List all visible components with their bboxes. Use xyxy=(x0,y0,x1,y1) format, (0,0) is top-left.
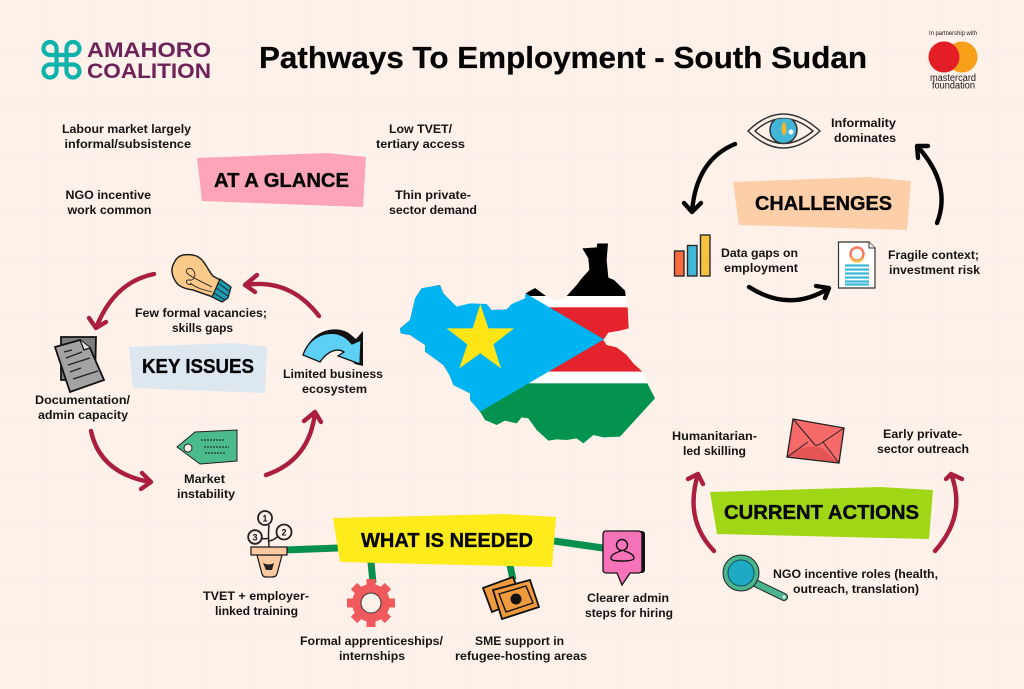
icon: eye xyxy=(748,114,820,148)
arrow: few vacancies to documentation xyxy=(89,274,154,328)
text: informality dominates xyxy=(831,116,896,145)
text: NGO incentive work xyxy=(66,188,152,217)
text: clearer admin xyxy=(585,591,673,620)
text: formal apprenticeships: Formal apprenticeships/ xyxy=(300,634,444,648)
logo: Mastercard Foundation xyxy=(928,31,978,92)
logo: Mastercard Foundation: In partnership with xyxy=(929,31,977,37)
icon: gear xyxy=(347,579,395,627)
heading: key issues: KEY ISSUES xyxy=(142,356,254,378)
text: low TVET: Low TVET/ xyxy=(389,122,453,136)
icon: profile pin xyxy=(603,531,645,585)
text: documentation: admin capacity xyxy=(38,408,128,422)
text: early private-sector outreach xyxy=(877,427,969,456)
panel: at a glance xyxy=(62,122,477,217)
heading: at a glance xyxy=(197,153,366,207)
logo wordmark: COALITION xyxy=(87,60,211,83)
text: thin private sector xyxy=(389,188,477,217)
text: early private-sector outreach: sector outreach xyxy=(877,442,969,456)
panel: current actions xyxy=(672,419,969,598)
text: NGO incentive roles: NGO incentive roles (health, xyxy=(773,567,938,581)
logo wordmark xyxy=(87,39,211,83)
icon: magnifying glass xyxy=(723,555,786,598)
map: South Sudan flag xyxy=(400,243,655,444)
text: NGO incentive roles: outreach, translation) xyxy=(793,582,919,596)
text: fragile context xyxy=(888,248,980,277)
arrow: market to ecosystem xyxy=(266,412,321,475)
text: NGO incentive work: NGO incentive xyxy=(66,188,151,202)
logo: Mastercard Foundation: foundation xyxy=(932,80,975,92)
text: SME support xyxy=(455,634,587,663)
icon: plant pot xyxy=(248,511,292,577)
icon: envelope xyxy=(787,419,844,463)
text: NGO incentive work: work common xyxy=(66,203,152,217)
text: market instability xyxy=(177,472,235,501)
arrow: informality to data gaps xyxy=(684,144,735,212)
icon: bar chart xyxy=(674,235,710,276)
text: documentation: Documentation/ xyxy=(35,393,131,407)
text: limited business xyxy=(283,367,383,396)
text: humanitarian-led skilling: led skilling xyxy=(683,444,746,458)
text: few formal vacancies xyxy=(135,306,267,335)
heading: challenges xyxy=(733,177,911,230)
icon: plant pot: 1 xyxy=(262,514,268,524)
icon: paper documents xyxy=(55,337,104,392)
text: TVET training: linked training xyxy=(215,604,298,618)
text: informality dominates: Informality xyxy=(831,116,896,130)
title: Pathways To Employment - South Sudan xyxy=(259,40,867,75)
text: fragile context: investment risk xyxy=(889,263,980,277)
heading: key issues xyxy=(129,343,267,393)
heading: current actions xyxy=(710,487,933,539)
text: data gaps: employment xyxy=(724,261,798,275)
arrow: ecosystem to few vacancies xyxy=(245,275,319,316)
icon: report document xyxy=(838,242,875,288)
text: limited business: ecosystem xyxy=(302,382,367,396)
text: thin private sector: Thin private- xyxy=(395,188,471,202)
text: humanitarian-led skilling xyxy=(672,429,757,458)
text: clearer admin: steps for hiring xyxy=(585,606,673,620)
heading: at a glance: AT A GLANCE xyxy=(214,170,349,192)
text: limited business: Limited business xyxy=(283,367,383,381)
text: clearer admin: Clearer admin xyxy=(587,591,669,605)
logo: Amahoro Coalition xyxy=(44,39,211,83)
logo wordmark: AMAHORO xyxy=(87,39,211,62)
icon: plant pot: 3 xyxy=(252,532,258,542)
icon: teal loop mark xyxy=(44,42,80,78)
heading: challenges: CHALLENGES xyxy=(755,193,892,215)
text: documentation xyxy=(35,393,131,422)
panel: what is needed xyxy=(203,511,673,663)
text: data gaps xyxy=(721,246,798,275)
icon: curved arrow xyxy=(303,329,363,366)
text: SME support: refugee-hosting areas xyxy=(455,649,587,663)
text: data gaps: Data gaps on xyxy=(721,246,798,260)
text: labour market: Labour market largely xyxy=(62,122,191,136)
text: NGO incentive roles xyxy=(773,567,938,596)
text: formal apprenticeships: internships xyxy=(339,649,405,663)
text: formal apprenticeships xyxy=(300,634,444,663)
text: SME support: SME support in xyxy=(475,634,564,648)
text: low TVET: tertiary access xyxy=(376,137,465,151)
panel: challenges xyxy=(674,114,980,300)
connectors xyxy=(285,541,603,583)
text: labour market: informal/subsistence xyxy=(64,137,191,151)
arrow: documentation to market xyxy=(91,431,151,489)
icon: light bulb xyxy=(172,255,231,302)
icon: money xyxy=(483,577,539,619)
text: fragile context: Fragile context; xyxy=(888,248,979,262)
logo: Mastercard Foundation: mastercard xyxy=(930,73,976,84)
heading: what is needed: WHAT IS NEEDED xyxy=(361,530,533,552)
text: humanitarian-led skilling: Humanitarian- xyxy=(672,429,757,443)
icon: price tag xyxy=(177,430,237,464)
icon: plant pot: 2 xyxy=(282,528,287,538)
heading: what is needed xyxy=(333,514,556,567)
text: market instability: instability xyxy=(177,487,235,501)
arrow: fragile context to informality xyxy=(917,146,942,223)
arrow: NGO roles to humanitarian xyxy=(688,474,714,551)
text: TVET training: TVET + employer- xyxy=(203,589,309,603)
heading: current actions: CURRENT ACTIONS xyxy=(724,502,919,524)
text: TVET training xyxy=(203,589,309,618)
text: low TVET xyxy=(376,122,465,151)
text: early private-sector outreach: Early private- xyxy=(883,427,962,441)
text: few formal vacancies: skills gaps xyxy=(172,321,233,335)
text: thin private sector: sector demand xyxy=(389,203,477,217)
text: informality dominates: dominates xyxy=(834,131,896,145)
flag star xyxy=(447,304,514,368)
arrow: NGO roles to private sector xyxy=(935,474,962,551)
text: few formal vacancies: Few formal vacancies; xyxy=(135,306,267,320)
panel: key issues xyxy=(35,255,383,501)
text: labour market xyxy=(62,122,191,151)
arrow: data gaps to fragile context xyxy=(749,286,829,300)
text: market instability: Market xyxy=(184,472,225,486)
